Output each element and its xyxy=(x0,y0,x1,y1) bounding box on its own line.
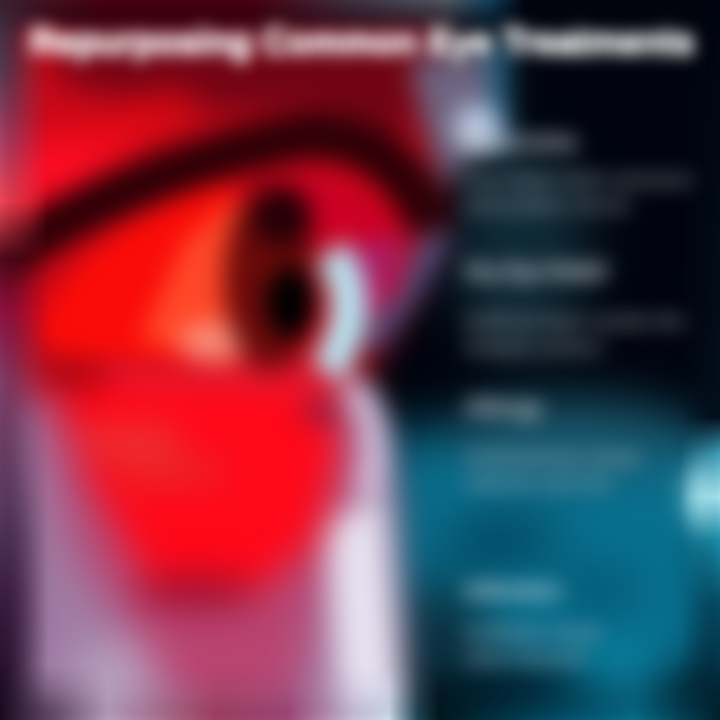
eye: pupil and cyan crescent xyxy=(266,252,349,372)
text block: section two xyxy=(454,250,690,366)
panel: teal glow background xyxy=(385,150,720,710)
text block: section four xyxy=(455,570,606,676)
text block: section two: Dry Eye Relief xyxy=(465,258,606,284)
text block: section two: Artificial tears soothe the xyxy=(465,311,684,333)
text block: section four: Antibiotic drops xyxy=(465,622,602,644)
eye: lower red area xyxy=(30,354,338,610)
icon: bright cyan highlight xyxy=(688,460,720,532)
face: skin and red lid area xyxy=(0,20,440,720)
panel: pale brow highlight and blue strip xyxy=(300,40,510,495)
face: pink halo around lower red xyxy=(25,370,355,720)
text block: section three xyxy=(456,386,644,500)
text block: section three: Antihistamine drops xyxy=(465,447,641,469)
text block: section four: clear bacteria xyxy=(465,648,585,670)
text block: section one: Glaucoma xyxy=(465,128,576,154)
title: Repurposing Common Eye Treatments xyxy=(30,20,694,61)
text block: section one: and protect nerves xyxy=(465,195,631,217)
text block: section two: irritated surface xyxy=(465,337,603,359)
eye: sclera, upper lid and iris xyxy=(0,137,432,370)
text block: section one xyxy=(459,122,697,222)
face: pale right column xyxy=(325,490,402,720)
text block: section one: Eye drops lower pressure xyxy=(465,169,692,191)
text block: section three: redness and itch xyxy=(465,473,612,495)
text block: section four: Infection xyxy=(465,577,561,603)
text block: section three: Allergy xyxy=(465,394,543,420)
